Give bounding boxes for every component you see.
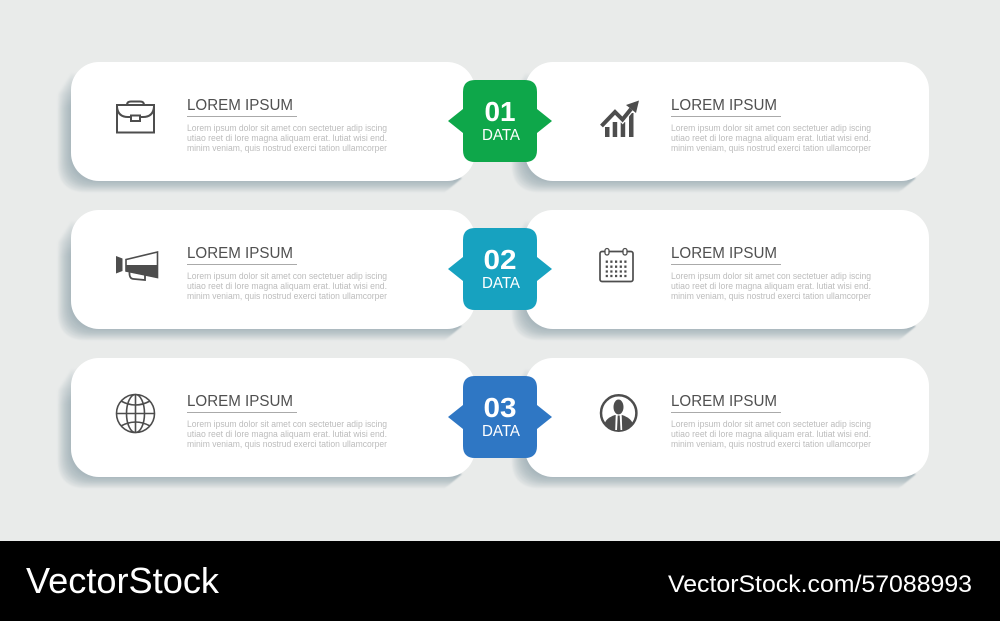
body text: utiao reet di lore magna aliquam erat. lutiat wisi end. (671, 429, 871, 439)
icon: businessman (601, 395, 636, 431)
body text: utiao reet di lore magna aliquam erat. lutiat wisi end. (187, 281, 387, 291)
body text: Lorem ipsum dolor sit amet con sectetuer adip iscing (671, 123, 871, 133)
badge: 02 DATA: 02 (484, 244, 516, 275)
body text (671, 271, 871, 301)
body text: Lorem ipsum dolor sit amet con sectetuer adip iscing (671, 419, 871, 429)
panel: row 3 right (512, 358, 929, 488)
icon: calendar (600, 248, 633, 282)
body text: utiao reet di lore magna aliquam erat. lutiat wisi end. (187, 133, 387, 143)
body text: utiao reet di lore magna aliquam erat. lutiat wisi end. (187, 429, 387, 439)
watermark url: VectorStock.com/57088993 (668, 571, 972, 598)
body text: utiao reet di lore magna aliquam erat. lutiat wisi end. (671, 281, 871, 291)
badge: 01 DATA (448, 80, 552, 162)
body text (187, 419, 387, 449)
badge: 02 DATA: DATA (482, 275, 521, 292)
panel: row 2 left (58, 210, 475, 340)
heading: LOREM IPSUM (187, 245, 293, 262)
body text (187, 123, 387, 153)
badge: 02 DATA (448, 228, 552, 310)
badge: 03 DATA: 03 (484, 392, 516, 423)
body text: Lorem ipsum dolor sit amet con sectetuer adip iscing (187, 123, 387, 133)
body text: minim veniam, quis nostrud exerci tation ullamcorper (671, 439, 871, 449)
panel: row 3 left (58, 358, 475, 488)
panel: row 1 right (512, 62, 929, 192)
footer bar (0, 541, 1000, 621)
icon: megaphone (116, 252, 158, 280)
body text: minim veniam, quis nostrud exerci tation ullamcorper (187, 143, 387, 153)
body text: minim veniam, quis nostrud exerci tation ullamcorper (187, 291, 387, 301)
body text: minim veniam, quis nostrud exerci tation ullamcorper (187, 439, 387, 449)
watermark logo: VectorStock (26, 560, 220, 601)
body text (187, 271, 387, 301)
icon: growth chart (602, 100, 639, 137)
icon: briefcase (117, 102, 154, 132)
badge: 01 DATA: DATA (482, 127, 521, 144)
body text: minim veniam, quis nostrud exerci tation ullamcorper (671, 143, 871, 153)
panel: row 1 left (58, 62, 475, 192)
panel: row 2 right (512, 210, 929, 340)
badge: 03 DATA: DATA (482, 423, 521, 440)
body text (671, 123, 871, 153)
body text: Lorem ipsum dolor sit amet con sectetuer adip iscing (671, 271, 871, 281)
heading: LOREM IPSUM (187, 97, 293, 114)
body text: Lorem ipsum dolor sit amet con sectetuer adip iscing (187, 271, 387, 281)
icon: globe (116, 394, 154, 432)
heading: LOREM IPSUM (671, 97, 777, 114)
badge: 01 DATA: 01 (484, 96, 516, 127)
heading: LOREM IPSUM (671, 245, 777, 262)
body text: Lorem ipsum dolor sit amet con sectetuer adip iscing (187, 419, 387, 429)
badge: 03 DATA (448, 376, 552, 458)
heading: LOREM IPSUM (187, 393, 293, 410)
body text: minim veniam, quis nostrud exerci tation ullamcorper (671, 291, 871, 301)
heading: LOREM IPSUM (671, 393, 777, 410)
body text (671, 419, 871, 449)
body text: utiao reet di lore magna aliquam erat. lutiat wisi end. (671, 133, 871, 143)
